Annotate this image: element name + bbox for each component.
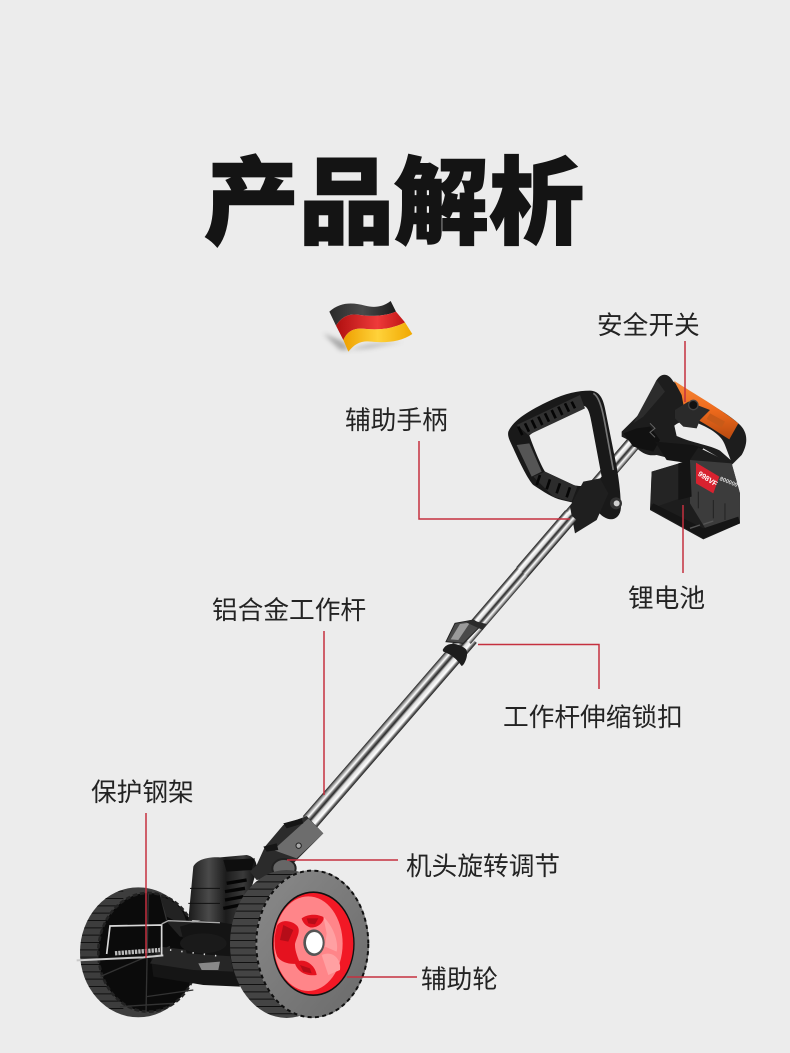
red hub: [272, 891, 355, 996]
pole segment in front of handle strap: [516, 510, 577, 577]
protective steel guard: [77, 921, 220, 960]
auxiliary handle and rear handle: [508, 375, 746, 539]
callout: auxiliary handle: [345, 406, 570, 519]
deck and chassis: [150, 910, 240, 987]
callout: head rotation adjustment: 机头旋转调节: [406, 852, 560, 881]
callout: protective steel frame: 保护钢架: [91, 778, 194, 807]
callout: safety switch: 安全开关: [597, 311, 700, 340]
callout: aluminium pole: 铝合金工作杆: [212, 596, 366, 625]
rotation bracket: [250, 816, 323, 880]
callout: telescopic lock: [478, 644, 683, 732]
upper telescopic pole: [459, 439, 639, 644]
lithium battery: [650, 447, 740, 539]
auxiliary D handle: [508, 391, 622, 533]
motor housing: [188, 855, 257, 925]
callout: lithium battery: [628, 505, 705, 613]
title: 产品解析: [204, 151, 584, 257]
callout: lithium battery: 锂电池: [628, 584, 705, 613]
callout: auxiliary wheel: 辅助轮: [421, 965, 498, 994]
product: lawn trimmer: [77, 375, 746, 1023]
lower telescopic pole: [303, 631, 477, 828]
icon: German flag: [323, 301, 412, 352]
callout: safety switch: [597, 311, 700, 402]
callout: auxiliary handle: 辅助手柄: [345, 406, 448, 435]
lithium battery: 998VF: [696, 469, 720, 489]
telescopic lock: [443, 620, 487, 666]
rear wheel: [80, 887, 194, 1018]
auxiliary wheel: [230, 867, 369, 1020]
rear handle grip: [622, 375, 746, 465]
lithium battery: 800000: [719, 476, 738, 489]
mower head: [77, 816, 369, 1023]
callout: telescopic lock: 工作杆伸缩锁扣: [503, 703, 683, 732]
